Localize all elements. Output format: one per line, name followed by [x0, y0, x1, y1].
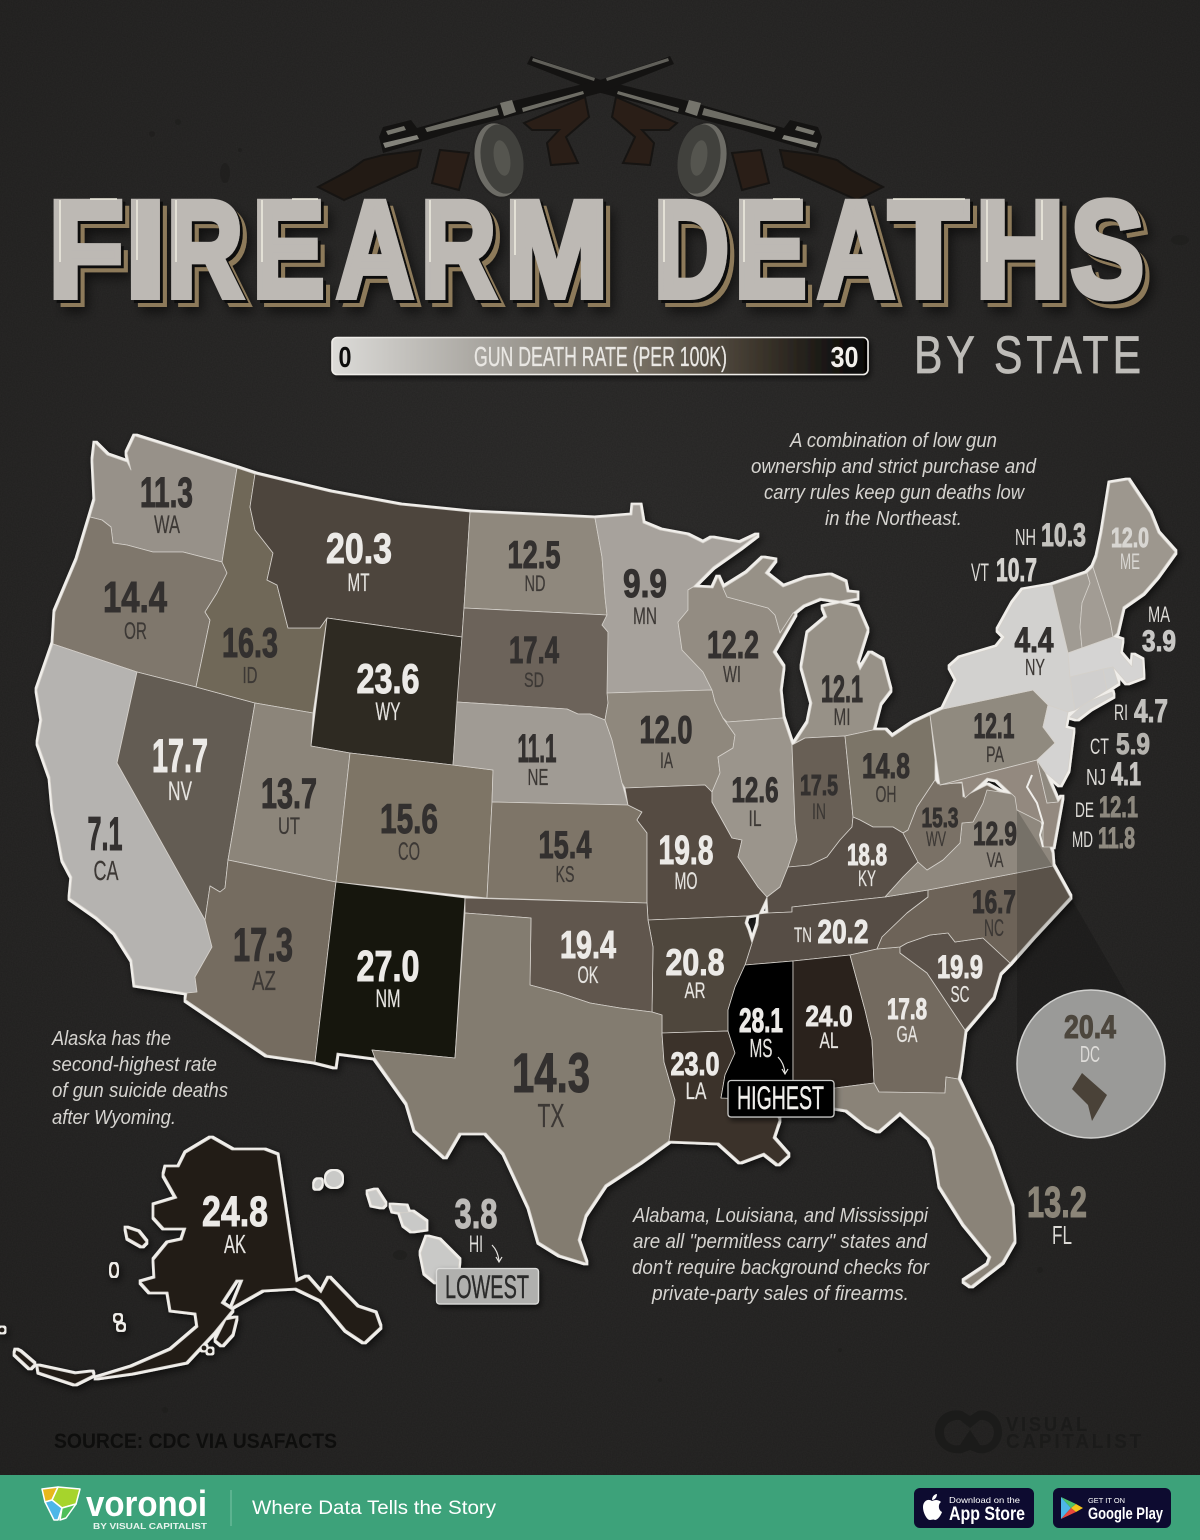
- label: CO: 15.6: [380, 795, 438, 842]
- state: SD: [457, 608, 608, 720]
- label: OH: OH: [876, 781, 896, 807]
- state: MS: [721, 961, 795, 1110]
- badge: google play: [1053, 1488, 1171, 1528]
- label: SC: [937, 949, 983, 1007]
- label: ID: ID: [242, 662, 258, 688]
- note: alaska: of gun suicide deaths: [52, 1079, 228, 1102]
- state: FL: [820, 1077, 1014, 1286]
- by visual capitalist: BY VISUAL CAPITALIST: [93, 1521, 208, 1531]
- label: AK: [202, 1188, 268, 1259]
- state: AZ: [186, 860, 336, 1062]
- label: TX: TX: [538, 1097, 564, 1134]
- legend: gun death rate colour scale: GUN DEATH RATE (PER 100K): [474, 341, 727, 372]
- label: AR: 20.8: [666, 942, 724, 983]
- note: northeast: in the Northeast.: [825, 507, 962, 530]
- label: WA: 11.3: [140, 469, 193, 517]
- label: MT: 20.3: [326, 525, 392, 573]
- state: KY: [767, 817, 918, 913]
- title: E: [253, 174, 324, 326]
- label: VT: 10.7: [996, 552, 1037, 588]
- label: LA: [670, 1046, 720, 1105]
- label: MO: 19.8: [658, 827, 714, 873]
- badge: lowest: [436, 1268, 538, 1305]
- island: Chirikof: [202, 1346, 206, 1350]
- label: FL: 13.2: [1027, 1178, 1087, 1227]
- label: ND: ND: [524, 571, 546, 596]
- title: S: [1071, 174, 1144, 326]
- label: WV: [922, 802, 958, 851]
- label: RI: 4.7: [1134, 693, 1168, 729]
- label: KY: 18.8: [847, 837, 887, 872]
- state: TN: [745, 890, 928, 965]
- label: MN: MN: [633, 603, 657, 630]
- label: MD: MD: [1072, 827, 1093, 852]
- label: MD: [1072, 822, 1135, 855]
- label: MI: [821, 669, 863, 731]
- gun: left-leaning: [318, 56, 674, 202]
- state: ID: [196, 468, 327, 713]
- label: KS: KS: [556, 861, 574, 887]
- label: MN: [623, 562, 667, 630]
- label: AR: AR: [684, 978, 706, 1003]
- note: permitless carry: private-party sales of firearms.: [651, 1282, 909, 1305]
- label: OK: [560, 924, 616, 989]
- label: CT: 5.9: [1116, 728, 1150, 761]
- label: NY: [1014, 621, 1054, 680]
- label: IA: 12.0: [640, 709, 692, 752]
- gun: right-leaning: [527, 56, 883, 202]
- note: alaska: second-highest rate: [52, 1053, 217, 1076]
- label: MN: 9.9: [623, 562, 667, 606]
- label: TX: [512, 1041, 590, 1134]
- label: DE: DE: [1075, 799, 1094, 822]
- label: SD: [509, 630, 559, 692]
- label: NC: 16.7: [972, 884, 1016, 920]
- title: T: [889, 174, 968, 326]
- note: alaska: after Wyoming.: [52, 1106, 176, 1129]
- label: WA: WA: [154, 511, 180, 539]
- state: OR: [53, 517, 227, 687]
- label: MT: MT: [348, 569, 370, 597]
- state: CT: [1070, 669, 1107, 710]
- state: IA: [605, 690, 735, 792]
- label: CA: CA: [94, 855, 119, 886]
- title: D: [654, 174, 729, 326]
- label: SC: 19.9: [937, 949, 983, 985]
- badge: app store: Download on the: [949, 1495, 1020, 1505]
- label: MD: 11.8: [1098, 822, 1135, 855]
- label: TN: 20.2: [818, 913, 868, 950]
- label: CO: CO: [398, 838, 420, 866]
- label: NV: 17.7: [152, 729, 208, 782]
- label: CT: [1090, 728, 1150, 761]
- map: state shapes: [0, 436, 1175, 1384]
- badge: app store: [914, 1488, 1034, 1528]
- island: Attu: [15, 1350, 34, 1368]
- state: NH: [1080, 567, 1113, 648]
- label: MI: 12.1: [821, 669, 863, 711]
- state: Long Island: [1070, 692, 1113, 719]
- voronoi gem icon: [42, 1487, 80, 1520]
- shadow wedge to DC inset: [1017, 810, 1165, 1064]
- title: A: [336, 174, 414, 326]
- label: WI: 12.2: [707, 624, 759, 667]
- state: VA: [885, 785, 1053, 897]
- label: RI: RI: [1114, 700, 1128, 725]
- label: CA: [88, 807, 122, 886]
- label: KY: [847, 837, 887, 891]
- DC label: DC: [1080, 1041, 1100, 1067]
- title: M: [505, 174, 608, 326]
- label: AZ: [233, 918, 293, 996]
- label: OR: [103, 573, 167, 645]
- label: ND: [508, 534, 560, 596]
- state: WV: [903, 780, 1000, 870]
- note: alaska: [50, 1027, 228, 1129]
- state: NC: [877, 866, 1070, 963]
- title: H: [976, 174, 1065, 326]
- state: MI upper: [723, 558, 857, 633]
- state: IN: [788, 736, 853, 867]
- label: UT: UT: [278, 813, 300, 840]
- state: NV: [117, 672, 255, 920]
- label: DE: [1075, 791, 1138, 824]
- label: IN: [800, 770, 838, 824]
- legend: gun death rate colour scale: 30: [830, 342, 858, 374]
- island: Pribilof south: [118, 1324, 124, 1330]
- label: NV: [152, 729, 208, 806]
- state: ND: [464, 512, 607, 615]
- title: R: [167, 174, 243, 326]
- badge: app store: App Store: [949, 1504, 1025, 1525]
- label: VA: 12.9: [973, 815, 1017, 852]
- label: IL: IL: [748, 806, 762, 831]
- state: LA: [662, 1031, 788, 1164]
- badge: google play: GET IT ON: [1088, 1496, 1125, 1505]
- label: FL: FL: [1052, 1220, 1072, 1250]
- logo: visual capitalist: VISUAL: [1006, 1414, 1090, 1436]
- island: Semidi: [208, 1348, 212, 1354]
- label: WY: [356, 655, 420, 726]
- state value labels: [88, 469, 1176, 1259]
- island: Nunivak: [111, 1264, 117, 1276]
- label: NY: 4.4: [1014, 621, 1054, 660]
- label: TN: TN: [794, 924, 812, 947]
- label: MT: [326, 525, 392, 597]
- label: FL: [1027, 1178, 1087, 1250]
- label: OK: 19.4: [560, 924, 616, 967]
- label: KS: 15.4: [538, 824, 592, 867]
- state: DE: [1037, 760, 1058, 803]
- legend: gun death rate colour scale: [332, 338, 868, 374]
- state: AK: [96, 1138, 380, 1378]
- label: LA: 23.0: [670, 1046, 720, 1082]
- island: Molokai: [391, 1205, 409, 1214]
- logo: visual capitalist: CAPITALIST: [1006, 1431, 1144, 1453]
- state: UT: [228, 703, 350, 882]
- label: TX: 14.3: [512, 1041, 590, 1104]
- state: NM: [315, 882, 465, 1067]
- islands: Aleutians: [38, 1366, 93, 1384]
- state: OK: [465, 898, 653, 1012]
- state: RI: [1103, 667, 1118, 690]
- legend: gun death rate colour scale: 0: [338, 342, 352, 374]
- note: alaska: Alaska has the: [50, 1027, 171, 1050]
- label: NM: NM: [376, 985, 400, 1013]
- state: MT: [250, 474, 470, 637]
- label: CA: 7.1: [88, 807, 122, 860]
- label: OR: 14.4: [103, 573, 167, 622]
- label: ND: 12.5: [508, 534, 560, 577]
- illustration: crossed tommy guns: [318, 56, 883, 202]
- badge: google play: Google Play: [1088, 1504, 1163, 1523]
- note: northeast: [751, 429, 1037, 530]
- island: Maui: [400, 1212, 426, 1231]
- label: NH: [1015, 517, 1086, 553]
- label: ME: 12.0: [1111, 522, 1149, 553]
- label: VA: VA: [986, 849, 1004, 872]
- label: NM: [356, 942, 420, 1013]
- label: MA: 3.9: [1142, 625, 1176, 658]
- label: CT: CT: [1090, 734, 1109, 759]
- state: MI lower: [795, 603, 890, 743]
- label: IA: IA: [660, 748, 673, 773]
- label: ME: ME: [1120, 549, 1140, 574]
- label: OH: 14.8: [862, 747, 910, 786]
- badge: highest: HIGHEST: [737, 1080, 824, 1116]
- state: CO: [336, 753, 493, 898]
- label: MA: [1142, 602, 1176, 658]
- label: WV: 15.3: [922, 802, 958, 833]
- label: VA: [973, 815, 1017, 872]
- label: UT: 13.7: [261, 770, 317, 818]
- label: IL: 12.6: [732, 771, 778, 810]
- island: Oahu: [368, 1190, 385, 1207]
- island: Big Island: [421, 1237, 459, 1282]
- state: OH: [845, 715, 935, 833]
- label: AZ: 17.3: [233, 918, 293, 971]
- label: IL: [732, 771, 778, 831]
- state: MD: [940, 760, 1062, 847]
- label: MS: [739, 1002, 783, 1063]
- note: permitless carry: are all "permitless carry" states and: [633, 1230, 928, 1253]
- arrow: HI to lowest: [492, 1245, 502, 1262]
- label: CO: [380, 795, 438, 866]
- title: E: [735, 174, 806, 326]
- label: NE: 11.1: [518, 727, 556, 771]
- label: VT: VT: [971, 559, 989, 587]
- label: WY: WY: [376, 698, 401, 726]
- label: PA: [974, 707, 1014, 767]
- label: MA: MA: [1148, 602, 1170, 627]
- note: permitless carry: don't require background checks for: [632, 1256, 930, 1279]
- subtitle: by state: BY STATE: [914, 326, 1145, 385]
- inset: DC circle: [1017, 990, 1165, 1138]
- bay: Chesapeake: [1027, 775, 1043, 847]
- state: VT: [1052, 573, 1090, 653]
- label: AL: AL: [820, 1028, 838, 1053]
- state: TX: [372, 913, 675, 1263]
- label: GA: [887, 993, 927, 1047]
- label: DE: 12.1: [1099, 791, 1138, 824]
- title: I: [125, 174, 166, 326]
- label: NC: NC: [984, 915, 1004, 942]
- label: AK: AK: [224, 1229, 246, 1259]
- label: OR: OR: [124, 618, 147, 645]
- label: SD: SD: [524, 669, 544, 692]
- label: NC: [972, 884, 1016, 942]
- DC shape: [1072, 1073, 1107, 1121]
- label: MO: MO: [674, 868, 698, 895]
- island: Kauai: [326, 1171, 342, 1187]
- label: UT: [261, 770, 317, 840]
- label: IN: IN: [812, 799, 826, 824]
- state: NE: [453, 702, 628, 805]
- note: northeast: A combination of low gun: [788, 429, 997, 452]
- label: NJ: NJ: [1086, 764, 1106, 790]
- title: [48, 174, 1144, 326]
- label: NJ: 4.1: [1111, 756, 1141, 792]
- voronoi wordmark: voronoi: [86, 1483, 207, 1524]
- label: AZ: AZ: [252, 965, 276, 996]
- label: TN: [794, 913, 868, 950]
- note: permitless carry: [631, 1204, 930, 1305]
- label: WV: WV: [926, 828, 946, 851]
- state: ME: [1093, 480, 1175, 637]
- label: NY: NY: [1025, 654, 1045, 680]
- badge: highest: [728, 1080, 834, 1117]
- label: PA: 12.1: [974, 707, 1014, 746]
- state: WA: [90, 436, 237, 562]
- title: R: [421, 174, 496, 326]
- label: SD: 17.4: [509, 630, 559, 672]
- label: HI: HI: [469, 1231, 483, 1258]
- DC value: 20.4: [1064, 1009, 1116, 1045]
- label: NE: [518, 727, 556, 790]
- logo: visual capitalist: [935, 1410, 1144, 1453]
- label: ID: 16.3: [222, 619, 278, 666]
- state: PA: [930, 690, 1055, 785]
- state: KS: [487, 802, 647, 903]
- footer band: [0, 1475, 1200, 1540]
- tagline: Where Data Tells the Story: [252, 1498, 497, 1519]
- arrow: MS to highest: [778, 1057, 788, 1074]
- label: ID: [222, 619, 278, 688]
- title: F: [48, 174, 124, 326]
- label: IA: [640, 709, 692, 773]
- label: AR: [666, 942, 724, 1003]
- label: NH: NH: [1015, 524, 1036, 550]
- island: far Aleutian: [0, 1328, 4, 1332]
- label: MS: 28.1: [739, 1002, 783, 1040]
- label: MI: MI: [834, 704, 850, 731]
- label: HI: [454, 1190, 498, 1258]
- note: northeast: carry rules keep gun deaths low: [764, 481, 1025, 504]
- label: KY: KY: [858, 866, 876, 891]
- label: OH: [862, 747, 910, 807]
- state: GA: [850, 947, 965, 1093]
- state: MA: [1068, 637, 1143, 683]
- note: permitless carry: Alabama, Louisiana, and Mississippi: [631, 1204, 929, 1227]
- label: NJ: [1086, 756, 1141, 792]
- state: IL: [712, 718, 797, 897]
- state: CA: [37, 644, 212, 993]
- label: WI: WI: [723, 661, 741, 687]
- note: northeast: ownership and strict purchase and: [751, 455, 1037, 478]
- state: WY: [311, 618, 462, 765]
- label: VT: [971, 552, 1037, 588]
- label: MS: MS: [750, 1033, 772, 1063]
- state: SC: [900, 933, 1010, 1030]
- label: LA: LA: [686, 1078, 706, 1105]
- label: GA: GA: [896, 1021, 918, 1047]
- label: PA: PA: [986, 742, 1004, 767]
- label: WA: [140, 469, 193, 539]
- label: SC: SC: [950, 981, 970, 1007]
- label: NM: 27.0: [356, 942, 420, 991]
- label: AL: 24.0: [806, 1001, 852, 1033]
- label: WI: [707, 624, 759, 687]
- label: GA: 17.8: [887, 993, 927, 1026]
- label: WY: 23.6: [356, 655, 420, 702]
- label: RI: [1114, 693, 1168, 729]
- state: MO: [625, 785, 767, 920]
- label: MO: [658, 827, 714, 895]
- island: Niihau: [313, 1178, 323, 1190]
- state: AL: [793, 955, 874, 1110]
- title highlights: [60, 199, 1042, 262]
- label: NV: NV: [168, 776, 192, 806]
- label: NE: NE: [528, 764, 548, 790]
- island: Kodiak: [216, 1318, 236, 1345]
- island: St Lawrence: [126, 1228, 146, 1246]
- state: AR: [648, 916, 752, 1033]
- label: OK: OK: [578, 962, 598, 989]
- source: SOURCE: CDC VIA USAFACTS: [54, 1430, 337, 1453]
- label: IN: 17.5: [800, 770, 838, 802]
- label: NH: 10.3: [1041, 517, 1086, 553]
- label: HI: 3.8: [454, 1190, 498, 1237]
- badge: lowest: LOWEST: [445, 1269, 529, 1305]
- label: ME: [1111, 522, 1149, 574]
- island: Pribilof north: [115, 1315, 121, 1321]
- state: MN: [595, 505, 757, 693]
- state: WI: [678, 577, 795, 722]
- state: NJ: [1037, 705, 1073, 785]
- state: NY: [943, 585, 1075, 712]
- label: KS: [538, 824, 592, 887]
- label: AL: [806, 1001, 852, 1053]
- label: AK: 24.8: [202, 1188, 268, 1236]
- title: A: [818, 174, 894, 326]
